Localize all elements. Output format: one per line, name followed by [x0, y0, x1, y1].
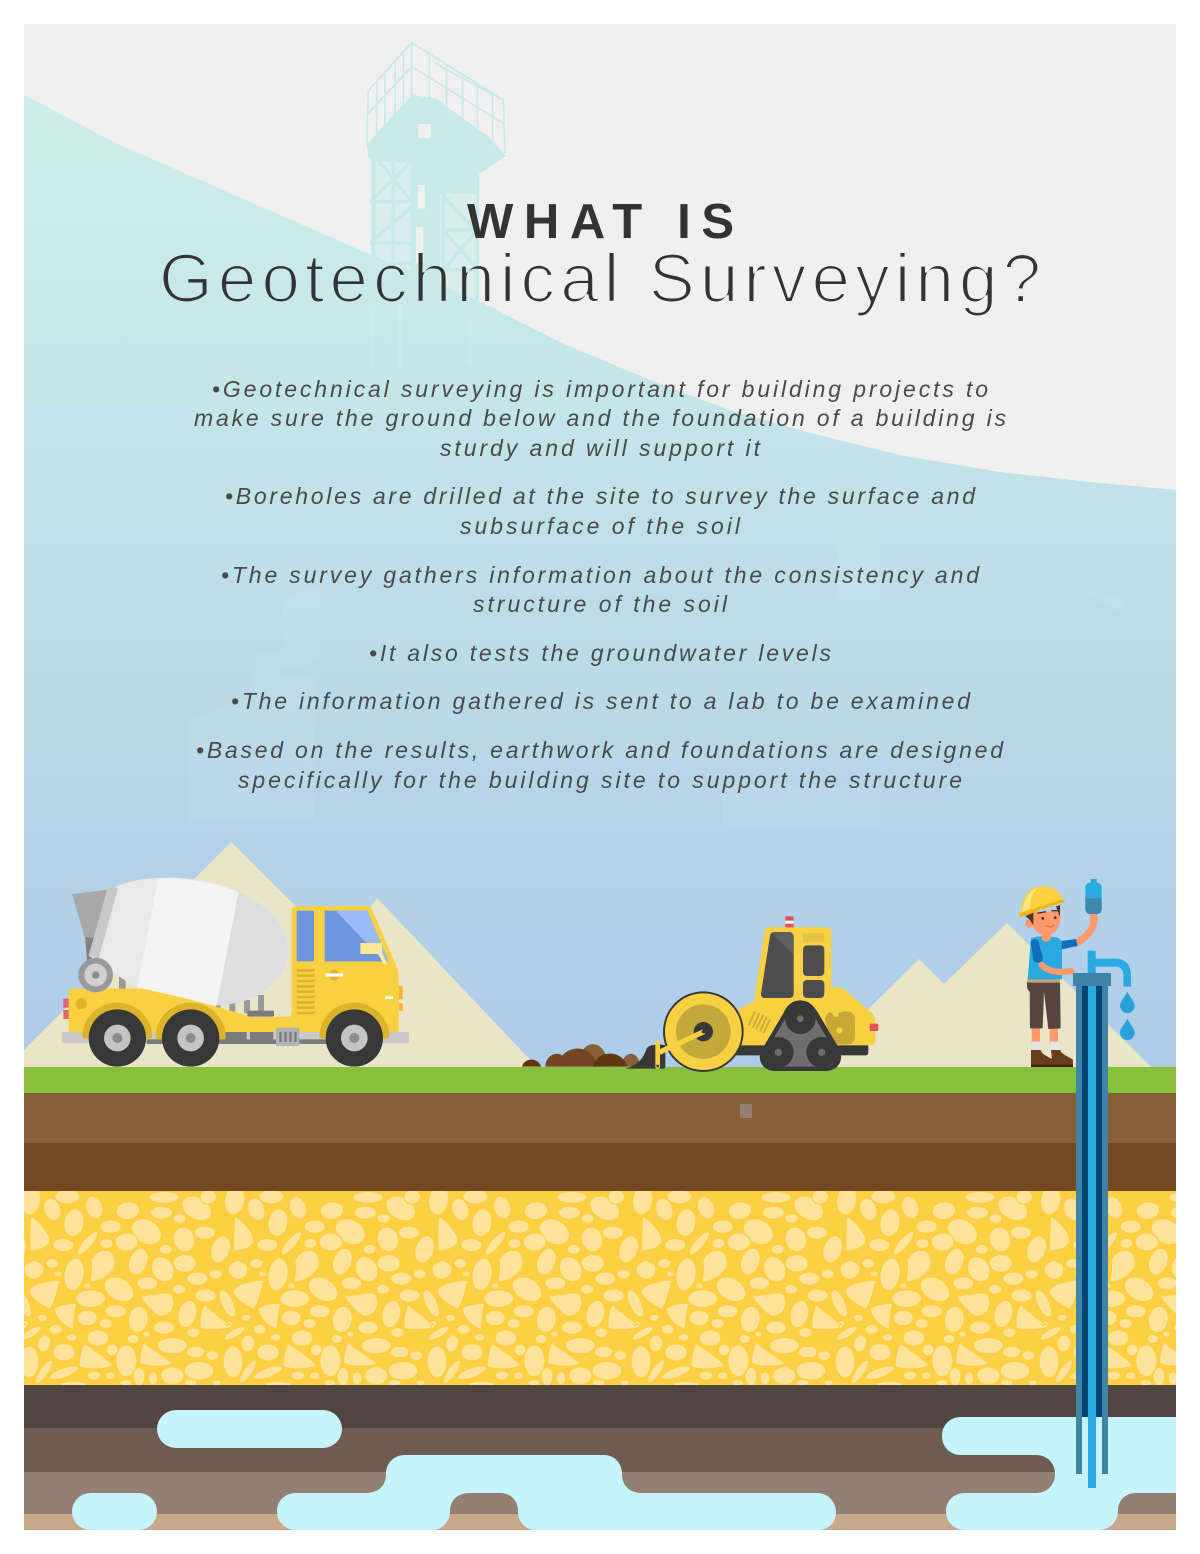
- chassis: [62, 1032, 409, 1043]
- dirt piles: [522, 1044, 640, 1067]
- faded tower on hillside: [372, 305, 470, 372]
- undercarriage: [736, 1045, 868, 1056]
- lights: [399, 986, 403, 999]
- wheels: [89, 1009, 146, 1067]
- mirror: [360, 943, 382, 954]
- shorts: [1027, 982, 1061, 1029]
- body text: subsurface of the soil: [460, 513, 741, 539]
- road roller: [625, 916, 878, 1071]
- body text: •Geotechnical surveying is important for building projects to: [212, 376, 988, 402]
- platform and core: [366, 95, 506, 284]
- drops: [1120, 992, 1135, 1013]
- vents and engine panel: [749, 1011, 770, 1033]
- sleeves: [1062, 939, 1078, 949]
- vents: [297, 969, 315, 1014]
- beacon: [785, 916, 794, 928]
- background tower: [367, 43, 506, 315]
- shirt: [1028, 936, 1062, 979]
- hard hat: [1018, 886, 1066, 917]
- boots: [1031, 1050, 1053, 1067]
- groundwater pockets: [72, 1410, 1176, 1530]
- lattice: [370, 157, 477, 313]
- drum wheel: [78, 958, 113, 992]
- body text: [194, 376, 1007, 793]
- neck and head: [1042, 928, 1051, 942]
- title: Geotechnical Surveying?: [159, 240, 1041, 317]
- body text: make sure the ground below and the foundation of a building is: [194, 405, 1007, 431]
- body text: •Boreholes are drilled at the site to survey the surface and: [225, 483, 976, 509]
- door handle: [329, 970, 340, 980]
- raised arm: [1078, 915, 1094, 942]
- body: [737, 927, 875, 1045]
- faded buildings on hillside: [188, 530, 1130, 826]
- ground layers: [24, 1067, 1176, 1530]
- arm: [657, 1029, 705, 1055]
- drum: [664, 992, 743, 1071]
- body text: •It also tests the groundwater levels: [369, 640, 832, 666]
- body text: sturdy and will support it: [440, 435, 762, 461]
- cement mixer truck: [62, 878, 409, 1067]
- windows: [297, 911, 314, 961]
- windows: [761, 932, 794, 998]
- body text: •The information gathered is sent to a lab to be examined: [231, 688, 971, 714]
- lower arm: [1042, 965, 1072, 972]
- background mountains: [24, 842, 1151, 1067]
- track: [760, 1000, 841, 1071]
- background sky: [24, 24, 1176, 490]
- body text: specifically for the building site to support the structure: [238, 767, 962, 793]
- hopper: [72, 890, 108, 938]
- title: WHAT IS: [467, 195, 734, 249]
- railing cage: [367, 43, 505, 153]
- grille: [276, 1028, 299, 1046]
- lattice backing: [371, 158, 479, 315]
- background hillside: [24, 95, 1176, 1100]
- title: [159, 195, 1041, 317]
- drum supports: [119, 977, 264, 1013]
- body text: •The survey gathers information about the consistency and: [221, 562, 980, 588]
- wheel arches: [82, 1003, 389, 1039]
- body text: •Based on the results, earthwork and foundations are designed: [196, 737, 1004, 763]
- body text: structure of the soil: [473, 591, 728, 617]
- borehole pipe: [1073, 973, 1111, 1488]
- bottle: [1091, 879, 1097, 884]
- tap pipe: [1088, 951, 1131, 987]
- legs: [1032, 1027, 1040, 1045]
- worker: [1018, 879, 1135, 1067]
- truck body: [69, 906, 399, 1032]
- blade: [625, 1045, 665, 1069]
- drum: [89, 878, 288, 1005]
